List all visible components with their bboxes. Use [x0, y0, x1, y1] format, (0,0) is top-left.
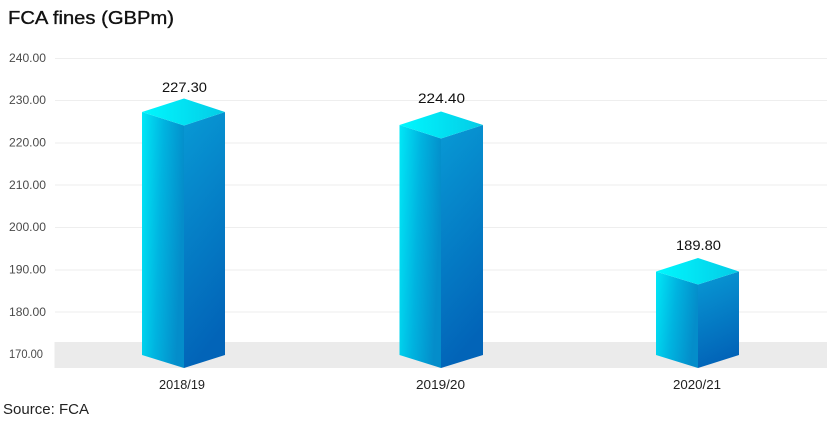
bar: 2019/20 [400, 112, 483, 368]
y axis labels: 210.00 [9, 180, 46, 192]
axis floor band [54, 342, 827, 368]
y axis labels: 190.00 [9, 264, 46, 276]
y axis labels: 230.00 [9, 95, 46, 107]
category labels: 2018/19 [159, 377, 205, 392]
value labels: 227.30 [162, 79, 207, 95]
bar: 2018/19 [142, 98, 225, 368]
category labels [159, 377, 721, 392]
y axis labels: 240.00 [9, 53, 46, 65]
y axis labels: 220.00 [9, 138, 46, 150]
value labels [162, 79, 721, 253]
y axis labels: 200.00 [9, 222, 46, 234]
title: FCA fines (GBPm) [8, 7, 174, 28]
source note: Source: FCA [3, 401, 89, 418]
y axis labels: 170.00 [9, 349, 43, 361]
y axis labels: 180.00 [9, 307, 46, 319]
bar: 2020/21 [656, 258, 739, 368]
value labels: 224.40 [418, 90, 465, 106]
y axis labels [9, 53, 46, 361]
y axis gridlines [55, 58, 827, 312]
category labels: 2020/21 [673, 377, 721, 392]
category labels: 2019/20 [416, 377, 465, 392]
value labels: 189.80 [676, 237, 721, 253]
